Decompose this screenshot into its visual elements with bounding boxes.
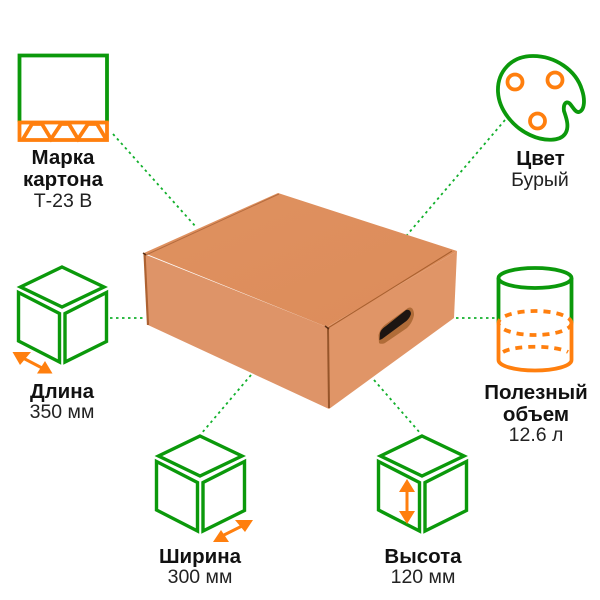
box: top face (144, 193, 457, 327)
label: volume: объем (503, 403, 569, 426)
label: volume: Полезный (484, 381, 588, 404)
icon: cylinder (498, 268, 572, 370)
length block (12, 267, 106, 423)
width block (156, 436, 253, 588)
height block (378, 436, 466, 588)
volume block (484, 268, 588, 446)
cardboard box (143, 193, 457, 409)
label: height: Высота (384, 545, 462, 568)
connector: length (110, 317, 146, 319)
label: width: Ширина (159, 545, 242, 568)
connector: width (201, 375, 251, 434)
label: carton grade: Марка (32, 146, 95, 169)
carton grade block (20, 56, 107, 212)
box: seams (143, 194, 452, 408)
icon: palette (498, 56, 584, 140)
label: length: 350 мм (30, 401, 94, 423)
box: left face (144, 254, 329, 409)
connector: carton grade (113, 134, 196, 227)
connector: colour (407, 120, 505, 235)
icon: corrugated cardboard (20, 56, 107, 140)
box: carrying handle slot (378, 307, 414, 344)
label: width: 300 мм (168, 566, 232, 588)
label: volume: 12.6 л (509, 424, 563, 446)
label: height: 120 мм (391, 566, 455, 588)
label: colour: Бурый (511, 169, 569, 191)
connector: height (374, 380, 421, 434)
label: length: Длина (30, 380, 95, 403)
connector: volume (456, 317, 497, 319)
label: carton grade: картона (23, 168, 104, 191)
label: colour: Цвет (516, 147, 565, 170)
icon: cube with height arrow (378, 436, 466, 531)
colour block (498, 56, 584, 191)
icon: cube with length arrow (12, 267, 106, 374)
box: right face (327, 251, 457, 409)
icon: cube with width arrow (156, 436, 253, 542)
label: carton grade: Т-23 В (34, 190, 92, 212)
